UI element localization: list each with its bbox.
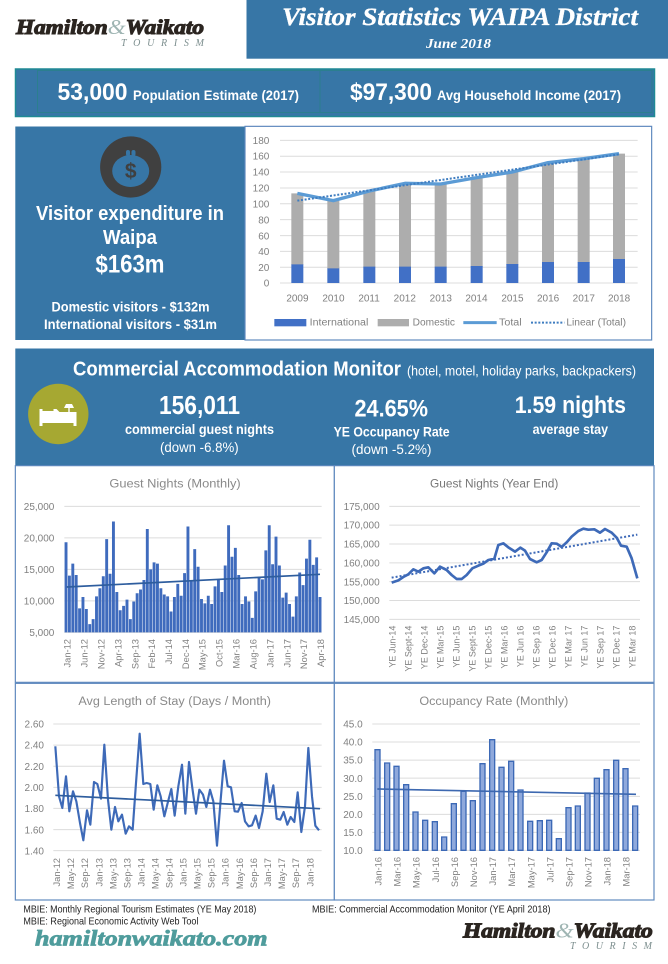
y axis labels: 155,000 — [344, 577, 380, 588]
expenditure total: $163m — [96, 251, 164, 279]
x axis labels: May-17 — [526, 857, 536, 888]
x axis labels: Jan-14 — [136, 858, 146, 887]
stat: guest nights — [125, 390, 274, 455]
y axis labels: 2.60 — [25, 720, 44, 731]
y axis labels: 165,000 — [344, 540, 380, 551]
panel: key statistics strip — [16, 69, 654, 116]
website address: hamiltonwaikato.com — [35, 926, 268, 951]
y axis labels: 100 — [253, 199, 270, 210]
x axis labels: Oct-15 — [215, 639, 225, 667]
title: Visitor Statistics WAIPA District — [282, 4, 639, 31]
x axis labels: Jan-12 — [63, 639, 73, 668]
sources: MBIE: Commercial Accommodation Monitor (YE April 2018) — [312, 903, 550, 915]
y axis labels: 15.0 — [343, 828, 363, 839]
x axis labels: YE Mar-16 — [500, 626, 510, 669]
stat: guest nights: 156,011 — [159, 390, 240, 420]
stat: average stay: 1.59 nights — [515, 392, 626, 419]
stat: occupancy rate — [334, 396, 450, 457]
y axis labels: 1.40 — [25, 846, 44, 857]
y axis labels: 25.0 — [343, 792, 363, 803]
stat: guest nights: (down -6.8%) — [160, 439, 239, 455]
chart title: Guest Nights (Year End) — [430, 477, 558, 491]
x axis labels: Nov-17 — [299, 639, 309, 669]
x axis labels: Dec-14 — [181, 639, 191, 669]
x axis labels: Jan-18 — [602, 857, 612, 886]
x axis labels: Jan-18 — [305, 858, 315, 887]
x axis labels: Mar-17 — [507, 857, 517, 887]
logo: Hamilton & Waikato Tourism: TOURISM — [121, 38, 205, 49]
trend line — [377, 789, 636, 794]
stat: guest nights: commercial guest nights — [125, 421, 274, 437]
x axis labels: YE Mar 17 — [564, 626, 574, 668]
x axis labels — [388, 626, 638, 672]
x axis labels: YE Jun 17 — [580, 626, 590, 667]
panel: visitor expenditure: Waipa — [103, 227, 158, 249]
x axis labels: YE Jun 16 — [516, 626, 526, 667]
x axis labels: Apr-18 — [316, 639, 326, 667]
x axis labels: May-17 — [277, 858, 287, 889]
y axis labels: 180 — [253, 136, 270, 147]
footer logo: TOURISM — [570, 941, 653, 952]
y axis labels: 40.0 — [343, 738, 363, 749]
x axis labels: Jul-17 — [545, 857, 555, 882]
logo: Hamilton & Waikato Tourism — [15, 15, 205, 49]
x axis labels: YE Sep 17 — [596, 626, 606, 669]
legend — [274, 318, 626, 329]
x axis labels: Mar-16 — [232, 639, 242, 669]
x axis labels: Jul-14 — [164, 639, 174, 664]
income label: Avg Household Income (2017) — [437, 87, 621, 103]
y axis labels: 0 — [264, 279, 270, 290]
x axis labels: YE Mar-15 — [436, 626, 446, 669]
legend: Total — [499, 318, 522, 329]
y axis labels: 20,000 — [24, 533, 55, 544]
y axis labels: 145,000 — [344, 615, 380, 626]
y axis labels — [343, 720, 363, 857]
header banner — [246, 0, 668, 59]
x axis labels: Jun-12 — [80, 639, 90, 668]
x axis labels: Sep-17 — [291, 858, 301, 888]
chart title: Occupancy Rate (Monthly) — [419, 694, 568, 708]
x axis labels: YE Sept-14 — [404, 626, 414, 672]
x axis labels: Aug-16 — [248, 639, 258, 669]
x axis labels: Sep-13 — [122, 858, 132, 888]
legend: International — [310, 318, 368, 329]
y axis labels: 1.80 — [25, 804, 44, 815]
chart: guest nights year end — [334, 466, 654, 682]
legend: Linear (Total) — [566, 318, 626, 329]
x axis labels — [52, 858, 315, 889]
x axis labels: Jan-17 — [265, 639, 275, 668]
sources: MBIE: Regional Economic Activity Web Tool — [23, 915, 198, 927]
x axis labels: Jan-16 — [374, 857, 384, 886]
y axis labels: 2.40 — [25, 741, 44, 752]
footer logo: Hamilton &Waikato — [462, 919, 653, 943]
x axis labels: 2014 — [465, 293, 488, 304]
y axis labels: 10.0 — [343, 846, 363, 857]
x axis labels: Mar-16 — [393, 857, 403, 887]
x axis labels: May-16 — [235, 858, 245, 889]
y axis labels: 40 — [258, 247, 270, 258]
monthly bars — [66, 521, 320, 632]
y axis labels: 10,000 — [24, 597, 55, 608]
y axis labels: 160 — [253, 152, 270, 163]
x axis labels: 2010 — [322, 293, 345, 304]
y axis labels: 120 — [253, 184, 270, 195]
y axis labels — [25, 720, 44, 857]
x axis labels: Jan-15 — [179, 858, 189, 887]
x axis labels: Sep-17 — [564, 857, 574, 887]
x axis labels: Sep-15 — [207, 858, 217, 888]
x axis labels: 2012 — [394, 293, 416, 304]
stat: occupancy rate: (down -5.2%) — [352, 441, 432, 457]
y axis labels: 160,000 — [344, 558, 380, 569]
total line — [297, 154, 619, 201]
chart: guest nights monthly — [15, 466, 334, 682]
y axis labels: 175,000 — [344, 502, 380, 513]
x axis labels: Jan-13 — [94, 858, 104, 887]
x axis labels: YE Dec-14 — [420, 626, 430, 669]
x axis labels — [286, 293, 631, 304]
income figure: $97,300 — [350, 79, 432, 106]
sources: MBIE: Monthly Regional Tourism Estimates (YE May 2018) — [23, 903, 256, 915]
y axis labels: 80 — [258, 215, 270, 226]
x axis labels: YE Dec-15 — [484, 626, 494, 669]
legend: Domestic — [413, 318, 455, 329]
x axis labels: 2013 — [430, 293, 452, 304]
x axis labels: Sep-13 — [130, 639, 140, 669]
y axis labels: 170,000 — [344, 521, 380, 532]
y axis labels: 20 — [258, 263, 270, 274]
domestic visitors: Domestic visitors - $132m — [52, 299, 210, 315]
x axis labels: Jan-17 — [263, 858, 273, 887]
y axis labels: 150,000 — [344, 596, 380, 607]
x axis labels: Feb-14 — [147, 639, 157, 669]
section sub-heading: (hotel, motel, holiday parks, backpackers) — [407, 364, 636, 379]
y axis labels: 140 — [253, 168, 270, 179]
y axis labels — [253, 136, 270, 290]
international visitors: International visitors - $31m — [44, 316, 217, 332]
y axis labels: 30.0 — [343, 774, 363, 785]
international bars — [291, 259, 625, 283]
monthly bars — [375, 740, 638, 850]
expenditure heading: Visitor expenditure in — [36, 203, 224, 225]
chart title: Guest Nights (Monthly) — [109, 477, 241, 491]
x axis labels: May-16 — [412, 857, 422, 888]
x axis labels: May-15 — [198, 639, 208, 670]
y axis labels — [344, 502, 380, 626]
y axis labels — [24, 502, 55, 639]
x axis labels: 2018 — [608, 293, 631, 304]
stat: occupancy rate: 24.65% — [354, 396, 428, 423]
panel: visitor expenditure — [15, 126, 245, 340]
y axis labels: 1.60 — [25, 825, 44, 836]
x axis labels: Nov-12 — [96, 639, 106, 669]
domestic bars — [291, 154, 625, 269]
sources — [23, 903, 550, 927]
chart: occupancy rate monthly — [334, 683, 654, 900]
panel: commercial accommodation monitor — [15, 348, 654, 466]
x axis labels: Jul-16 — [431, 857, 441, 882]
icon: money purse: $ — [125, 160, 137, 183]
icon: money purse — [100, 136, 161, 198]
trend line — [392, 535, 637, 578]
x axis labels — [374, 857, 632, 888]
x axis labels: 2017 — [573, 293, 595, 304]
x axis labels: Sep-12 — [80, 858, 90, 888]
x axis labels: Jan-16 — [221, 858, 231, 887]
x axis labels: Mar-18 — [622, 857, 632, 887]
x axis labels: May-15 — [193, 858, 203, 889]
linear trend line — [297, 154, 619, 201]
x axis labels: Jan-12 — [52, 858, 62, 887]
section heading: Commercial Accommodation Monitor — [73, 359, 401, 381]
x axis labels: Sep-14 — [165, 858, 175, 888]
y axis labels: 35.0 — [343, 756, 363, 767]
x axis labels: May-12 — [66, 858, 76, 889]
y axis labels: 15,000 — [24, 565, 55, 576]
x axis labels: 2009 — [286, 293, 309, 304]
stat: average stay — [515, 392, 626, 437]
trend line — [55, 795, 320, 809]
x axis labels: Sep-16 — [249, 858, 259, 888]
x axis labels: May-13 — [108, 858, 118, 889]
x axis labels: YE Jun-14 — [388, 626, 398, 668]
x axis labels: Sep-16 — [450, 857, 460, 887]
x axis labels: 2011 — [358, 293, 380, 304]
x axis labels — [63, 639, 326, 670]
x axis labels: 2015 — [501, 293, 524, 304]
y axis labels: 5,000 — [29, 628, 55, 639]
stat: occupancy rate: YE Occupancy Rate — [334, 424, 450, 440]
x axis labels: 2016 — [537, 293, 560, 304]
footer logo — [462, 919, 653, 952]
x axis labels: YE Sept-15 — [468, 626, 478, 672]
x axis labels: Nov-17 — [583, 857, 593, 887]
x axis labels: YE Sep 16 — [532, 626, 542, 669]
population label: Population Estimate (2017) — [133, 87, 299, 103]
x axis labels: YE Mar 18 — [628, 626, 638, 668]
x axis labels: YE Jun-15 — [452, 626, 462, 668]
logo: Hamilton & Waikato Tourism: Hamilton &Waikato — [15, 15, 204, 39]
monthly stay line — [55, 734, 319, 846]
x axis labels: YE Dec 16 — [548, 626, 558, 669]
year-end line — [392, 529, 637, 583]
y axis labels: 25,000 — [24, 502, 55, 513]
chart: average length of stay — [15, 683, 334, 900]
x axis labels: Nov-16 — [469, 857, 479, 887]
x axis labels: May-14 — [150, 858, 160, 889]
y axis labels: 20.0 — [343, 810, 363, 821]
y axis labels: 2.00 — [25, 783, 44, 794]
y axis labels: 60 — [258, 231, 270, 242]
y axis labels: 2.20 — [25, 762, 44, 773]
icon: bed — [28, 384, 88, 444]
stat: average stay: average stay — [533, 421, 608, 437]
x axis labels: Apr-13 — [113, 639, 123, 667]
x axis labels: Jun-17 — [282, 639, 292, 668]
trend line — [67, 574, 320, 587]
chart title: Avg Length of Stay (Days / Month) — [78, 694, 271, 708]
x axis labels: YE Dec 17 — [612, 626, 622, 669]
date: June 2018 — [425, 37, 491, 52]
population figure: 53,000 — [58, 79, 128, 106]
y axis labels: 45.0 — [343, 720, 363, 731]
x axis labels: Jan-17 — [488, 857, 498, 886]
chart: visitor expenditure by year — [245, 126, 652, 340]
